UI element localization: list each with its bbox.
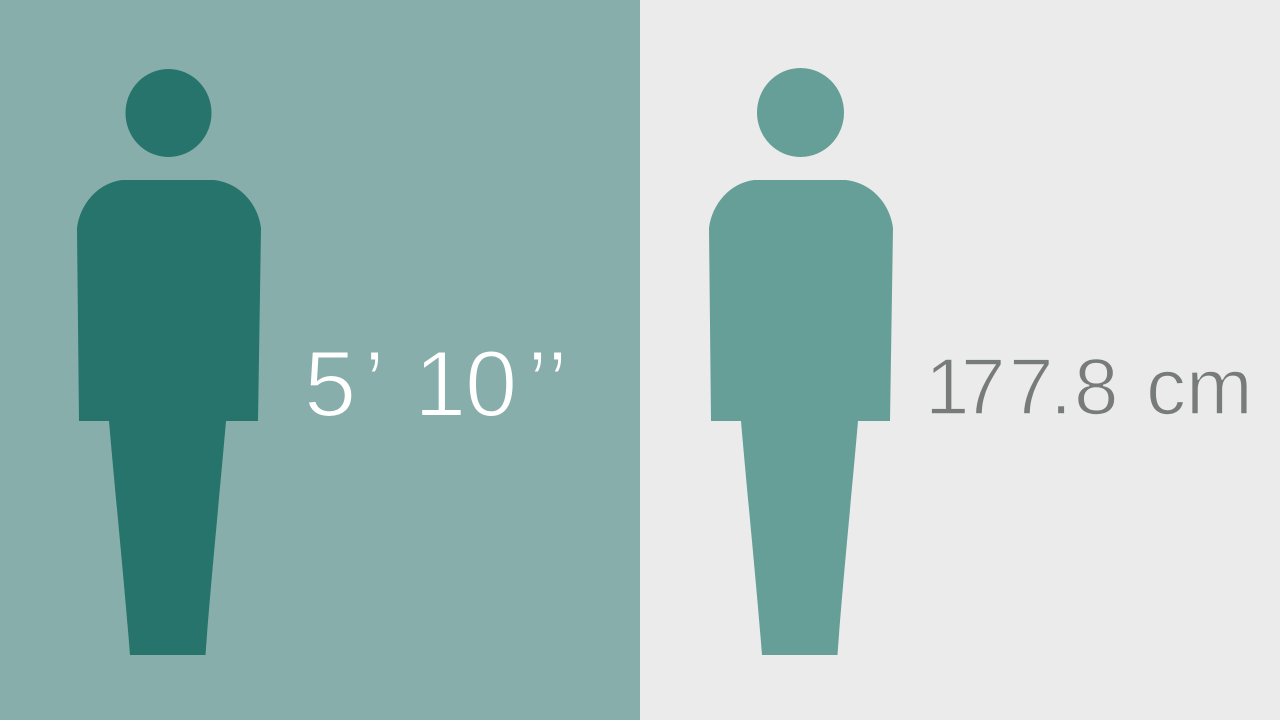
text: height in centimetres: 177.8 cm: [925, 342, 1253, 431]
icon: dark teal person: [77, 69, 261, 655]
icon: light teal person: [709, 68, 893, 655]
panel: imperial height: [0, 0, 640, 720]
panel: metric height: [640, 0, 1280, 720]
text: height in feet and inches: 5’ 10’’: [304, 331, 568, 436]
